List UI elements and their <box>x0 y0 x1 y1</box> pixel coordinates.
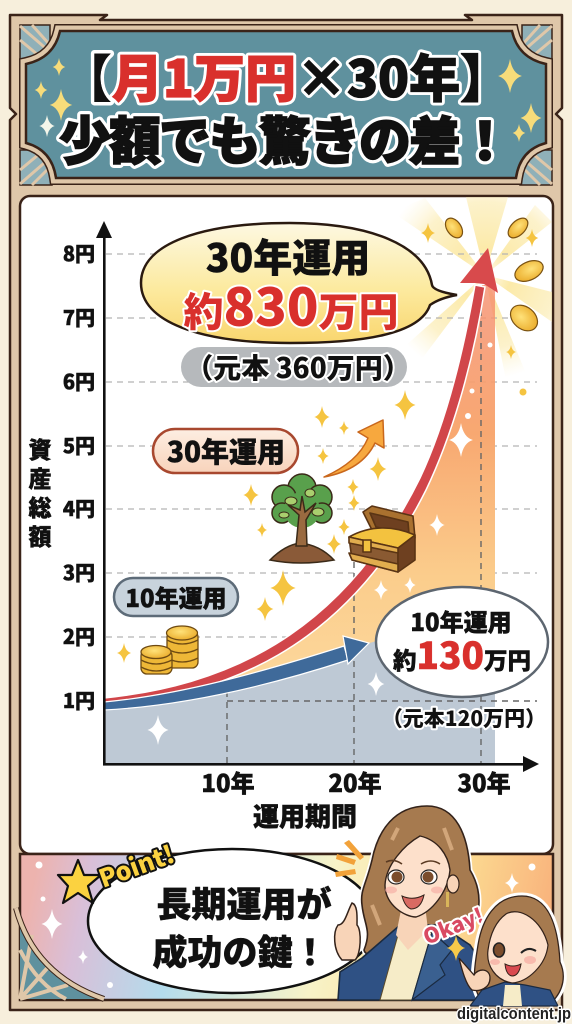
area: 10 year growth <box>104 640 495 764</box>
icon: tree <box>270 474 334 563</box>
hair <box>474 896 563 1002</box>
character: large woman <box>335 806 490 1000</box>
orange arrow icon <box>324 420 384 477</box>
callout: 10 year result: 10年運用 <box>410 603 512 638</box>
vertical grid lines <box>227 310 537 764</box>
callout: 30 year result: 30年運用 <box>206 228 370 284</box>
principal pill: 360: （元本 360万円） <box>185 347 411 387</box>
character: small woman <box>459 896 563 1006</box>
y axis labels: 4円 <box>63 493 95 522</box>
blouse <box>380 932 432 1000</box>
principal note: 120: （元本120万円） <box>382 703 546 733</box>
bubble text: 成功の鍵！ <box>152 925 328 976</box>
y axis title: 総 <box>28 489 52 523</box>
gold sparkles <box>117 390 416 663</box>
corner ornament: top left <box>20 25 50 60</box>
callout: 10 year result: 約130万円 <box>393 626 531 680</box>
tan mat <box>26 31 546 178</box>
wink eye <box>521 949 536 953</box>
y axis labels <box>63 238 95 714</box>
x axis labels: 30年 <box>457 764 511 799</box>
title line 1: 【月1万円×30年】 <box>61 38 511 112</box>
open eye <box>494 943 504 957</box>
fan ribs <box>20 25 552 185</box>
burst sparkles <box>421 223 538 396</box>
y axis title: 産 <box>28 460 52 494</box>
callout: 30 year result <box>141 223 457 343</box>
eyes <box>388 870 437 884</box>
y axis labels: 6円 <box>63 366 95 395</box>
face <box>488 912 548 983</box>
title line 2: 少額でも驚きの差！ <box>59 100 509 175</box>
x axis labels <box>201 764 511 799</box>
label: 30 year: 30年運用 <box>167 431 285 471</box>
earring <box>446 892 449 907</box>
title line 1: 【月1万円×30年】 <box>61 38 511 112</box>
blue growth arrow <box>104 636 369 710</box>
hair highlights <box>372 828 452 925</box>
okay sparkle <box>447 935 465 961</box>
y axis labels: 3円 <box>63 557 95 586</box>
title banner <box>20 25 552 185</box>
y axis title <box>28 431 52 552</box>
corner ornament: bottom right <box>520 150 552 185</box>
y axis labels: 1円 <box>63 685 95 714</box>
area: 30 year growth <box>104 285 495 764</box>
y axis labels: 5円 <box>63 430 95 459</box>
bubble text <box>152 877 332 976</box>
teal panel <box>26 31 546 178</box>
title line 2: 少額でも驚きの差！ <box>59 100 509 175</box>
area sparkles <box>148 342 492 745</box>
orange emphasis marks <box>335 840 364 877</box>
blush <box>385 886 443 894</box>
ok hand <box>459 958 490 990</box>
gold coins <box>442 215 546 336</box>
corner ornament: bottom left <box>20 150 52 185</box>
brows <box>386 860 440 864</box>
ear <box>447 875 459 893</box>
x axis labels: 20年 <box>328 764 382 799</box>
callout: 30 year result: 約830万円 <box>183 266 399 341</box>
jacket <box>470 982 558 1006</box>
hair <box>362 806 479 955</box>
title sparkles <box>35 58 541 142</box>
okay text: Okay! <box>418 900 488 951</box>
corner ornament: bottom panel left <box>16 908 104 999</box>
chart panel <box>20 196 553 854</box>
blush <box>490 956 536 965</box>
y axis title: 資 <box>28 431 52 465</box>
label: 10 year: 10年運用 <box>125 579 227 614</box>
y axis labels: 2円 <box>63 621 95 650</box>
mouth <box>505 964 521 976</box>
y axis labels: 7円 <box>63 302 95 331</box>
jacket <box>338 925 490 1000</box>
x axis labels: 10年 <box>201 764 255 799</box>
speech bubble <box>88 849 376 993</box>
bubble text: 長期運用が <box>156 877 332 928</box>
face <box>385 836 450 917</box>
corner ornament: top right <box>522 25 552 60</box>
x axis title: 運用期間 <box>253 797 357 834</box>
y axis labels: 8円 <box>63 238 95 267</box>
point panel <box>16 854 553 1000</box>
panel sparkles <box>36 862 536 988</box>
icon: treasure chest <box>349 506 415 572</box>
burst rays behind arrow tip <box>392 197 552 400</box>
axes <box>96 221 539 772</box>
mouth <box>402 895 424 909</box>
lapel <box>412 932 452 1000</box>
neck <box>396 905 428 950</box>
blouse <box>503 985 522 1006</box>
grid lines <box>106 254 537 637</box>
callout: 10 year result <box>376 587 548 697</box>
point badge <box>58 835 179 903</box>
thumbs up hand <box>335 903 360 960</box>
y axis title: 額 <box>28 518 52 552</box>
red growth arrow <box>104 248 498 706</box>
icon: coin stacks <box>141 626 198 674</box>
point badge: Point! <box>93 835 179 896</box>
